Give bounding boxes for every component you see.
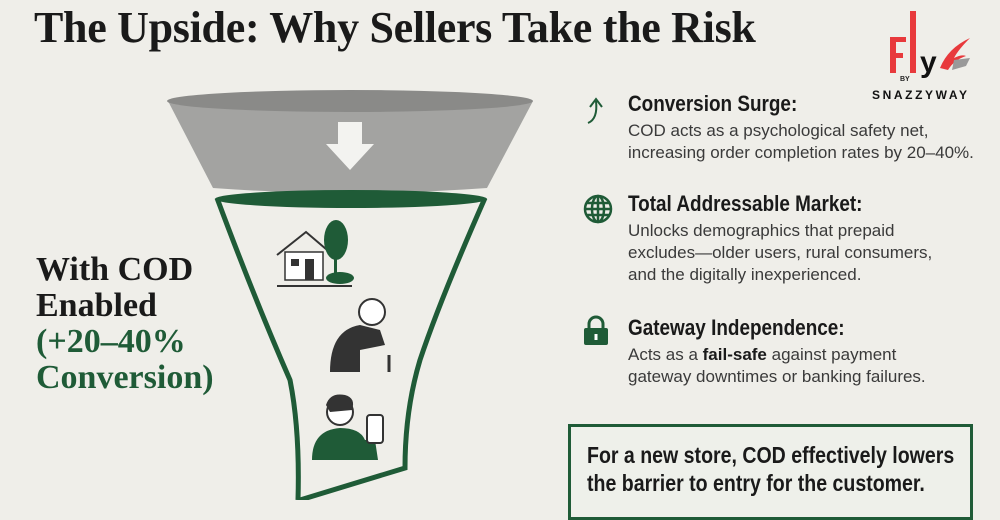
funnel top gray: [167, 90, 533, 193]
left label: Enabled: [36, 287, 157, 324]
item: total addressable market: [584, 191, 932, 284]
item: conversion surge: increasing order completion rates by 20–40%.: [628, 143, 974, 162]
icon: elderly person: [330, 299, 389, 372]
item: gateway independence: [584, 315, 926, 386]
item: conversion surge: Conversion Surge:: [628, 91, 797, 116]
item: total addressable market: and the digitally inexperienced.: [628, 265, 861, 284]
left label: [36, 251, 214, 396]
icon: up arrow: [588, 98, 603, 124]
funnel green body: [215, 190, 487, 500]
item: gateway independence: gateway downtimes or banking failures.: [628, 367, 926, 386]
item: gateway independence: Acts as a fail-safe against payment: [628, 345, 896, 364]
logo: y: [920, 46, 937, 79]
item: conversion surge: COD acts as a psychological safety net,: [628, 121, 928, 140]
left label: (+20–40%: [36, 323, 186, 360]
left label: Conversion): [36, 359, 214, 396]
logo: BY: [900, 76, 910, 83]
item: total addressable market: excludes—older users, rural consumers,: [628, 243, 932, 262]
logo: [872, 11, 970, 100]
item: conversion surge: [588, 91, 974, 162]
funnel: [167, 90, 533, 500]
item: total addressable market: Total Addressable Market:: [628, 191, 862, 216]
icon: padlock: [584, 316, 608, 345]
callout: [568, 424, 973, 520]
icon: rural house: [277, 220, 354, 286]
icon: globe: [584, 194, 612, 224]
callout: the barrier to entry for the customer.: [587, 470, 925, 496]
title: The Upside: Why Sellers Take the Risk: [34, 3, 756, 52]
item: total addressable market: Unlocks demographics that prepaid: [628, 221, 894, 240]
left label: With COD: [36, 251, 193, 288]
item: gateway independence: Gateway Independence:: [628, 315, 845, 340]
icon: young person with phone: [312, 394, 383, 460]
callout: For a new store, COD effectively lowers: [587, 442, 954, 468]
